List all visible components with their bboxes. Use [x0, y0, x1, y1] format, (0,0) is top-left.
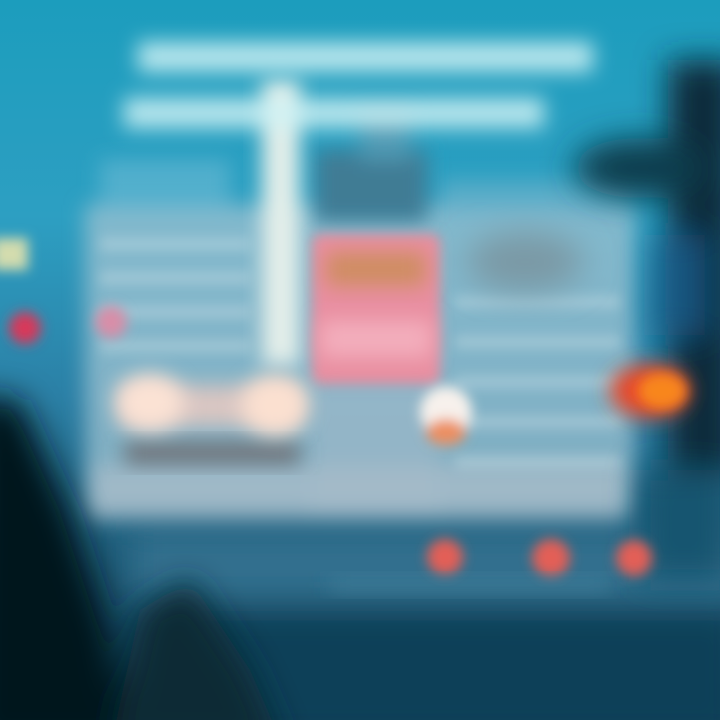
card orange band	[326, 252, 426, 286]
pink card	[312, 234, 440, 384]
main panel	[85, 160, 635, 520]
right glow	[241, 375, 309, 435]
title	[124, 42, 593, 128]
dark silhouette, lower left	[0, 395, 285, 720]
footer stripe	[330, 578, 610, 592]
title line 1	[138, 42, 593, 72]
title line 2	[124, 98, 544, 128]
grey chart mound	[467, 232, 583, 292]
vertical white column	[262, 80, 300, 365]
red dot left	[9, 312, 41, 344]
panel row stripes	[100, 238, 620, 468]
orange marker	[610, 364, 690, 418]
dark header block	[315, 110, 427, 222]
white circle marker	[420, 386, 472, 445]
bottom road band	[130, 530, 720, 720]
yellow marker	[0, 238, 28, 270]
red dots row	[427, 539, 652, 577]
highlighted row	[116, 374, 309, 464]
pink dot	[95, 306, 127, 338]
dark shadow strip	[125, 442, 300, 464]
left glow	[116, 374, 184, 430]
palm silhouette, right	[574, 60, 720, 580]
card pale band	[320, 320, 432, 358]
